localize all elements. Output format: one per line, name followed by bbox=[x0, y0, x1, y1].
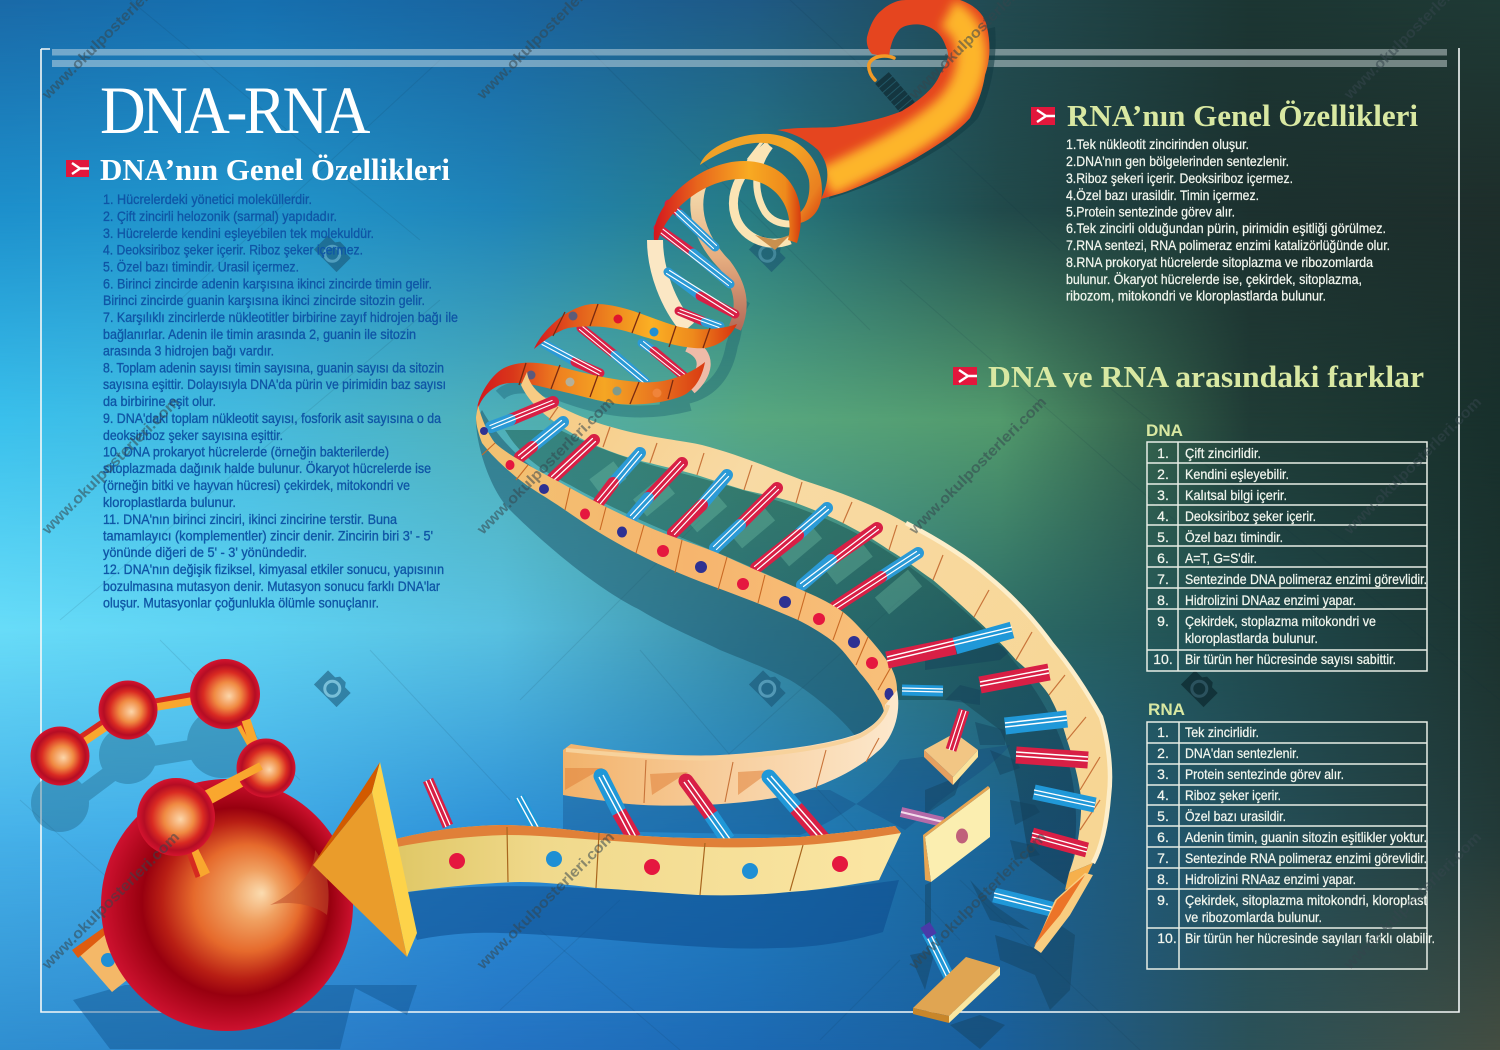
table: RNA bbox=[1147, 700, 1435, 969]
text block: RNA features: 8.RNA prokoryat hücrelerde sitoplazma ve ribozomlarda bbox=[1066, 254, 1373, 270]
broken base pairs on the right bbox=[887, 627, 1095, 996]
table: DNA: 5. bbox=[1157, 529, 1169, 545]
broken strand piece behind sphere bbox=[72, 928, 127, 992]
table: RNA: DNA'dan sentezlenir. bbox=[1185, 745, 1299, 761]
table: DNA: 2. bbox=[1157, 466, 1169, 482]
large red sphere bbox=[101, 779, 353, 1031]
text block: DNA features: 2. Çift zincirli helozonik (sarmal) yapıdadır. bbox=[103, 208, 337, 224]
text block: RNA features: bulunur. Ökaryot hücrelerde ise, çekirdek, sitoplazma, bbox=[1066, 270, 1362, 287]
table: DNA: Kalıtsal bilgi içerir. bbox=[1185, 487, 1287, 503]
shadows of the DNA ribbon bbox=[400, 300, 1076, 1049]
text block: DNA features bbox=[103, 191, 458, 610]
website watermarks: www.okulposterleri.com bbox=[38, 394, 183, 539]
text block: RNA features: 7.RNA sentezi, RNA polimeraz enzimi katalizörlüğünde olur. bbox=[1066, 237, 1390, 253]
website watermarks: www.okulposterleri.com bbox=[473, 829, 618, 974]
text block: RNA features: 4.Özel bazı urasildir. Timin içermez. bbox=[1066, 186, 1259, 203]
table: DNA: 9. bbox=[1157, 613, 1169, 629]
text block: DNA features: 3. Hücrelerde kendini eşleyebilen tek molekuldür. bbox=[103, 225, 374, 241]
text block: RNA features bbox=[1066, 136, 1390, 304]
table: DNA: Özel bazı timindir. bbox=[1185, 528, 1283, 545]
text block: RNA features: ribozom, mitokondri ve kloroplastlarda bulunur. bbox=[1066, 288, 1326, 304]
text block: DNA features: 4. Deoksiriboz şeker içerir. Riboz şeker içermez. bbox=[103, 242, 363, 258]
arrow head bbox=[313, 762, 417, 957]
table: DNA: Çift zincirlidir. bbox=[1185, 445, 1261, 461]
table: RNA: 6. bbox=[1157, 829, 1169, 845]
text block: DNA features: bağlanırlar. Adenin ile timin arasında 2, guanin ile sitozin bbox=[103, 326, 416, 342]
website watermarks: www.okulposterleri.com bbox=[905, 829, 1050, 974]
table: DNA: A=T, G=S'dir. bbox=[1185, 550, 1257, 566]
DNA tail and curl bbox=[777, 0, 996, 199]
table: DNA: kloroplastlarda bulunur. bbox=[1185, 630, 1318, 646]
website watermarks: www.okulposterleri.com bbox=[1340, 394, 1485, 539]
table: RNA: 4. bbox=[1157, 787, 1169, 803]
table: RNA: Bir türün her hücresinde sayıları farklı olabilir. bbox=[1185, 930, 1435, 946]
table: RNA: Adenin timin, guanin sitozin eşitlikler yoktur. bbox=[1185, 829, 1427, 845]
heading: DNA features: DNA’nın Genel Özellikleri bbox=[100, 152, 450, 187]
text block: DNA features: 10. DNA prokaryot hücrelerde (örneğin bakterilerde) bbox=[103, 444, 389, 460]
text block: DNA features: 12. DNA'nın değişik fiziksel, kimyasal etkiler sonucu, yapısının bbox=[103, 561, 444, 577]
text block: DNA features: 11. DNA'nın birinci zinciri, ikinci zincirine terstir. Buna bbox=[103, 511, 397, 527]
table: DNA: 7. bbox=[1157, 571, 1169, 587]
table: RNA: 8. bbox=[1157, 871, 1169, 887]
text block: DNA features: sitoplazmada dağınık halde bulunur. Ökaryot hücrelerde ise bbox=[103, 459, 431, 476]
heading: RNA features: RNA’nın Genel Özellikleri bbox=[1067, 98, 1418, 133]
table: RNA: ve ribozomlarda bulunur. bbox=[1185, 909, 1322, 925]
upper cream DNA strand bbox=[521, 372, 1110, 873]
table: DNA: 6. bbox=[1157, 550, 1169, 566]
text block: RNA features: 1.Tek nükleotit zincirinden oluşur. bbox=[1066, 136, 1249, 152]
table: DNA: DNA bbox=[1146, 421, 1183, 440]
table: RNA: 1. bbox=[1157, 724, 1169, 740]
table: RNA: RNA bbox=[1148, 700, 1185, 719]
table: DNA bbox=[1146, 421, 1427, 671]
table: DNA: Hidrolizini DNAaz enzimi yapar. bbox=[1185, 592, 1356, 608]
lower front rungs bbox=[426, 775, 826, 841]
table: DNA: 10. bbox=[1153, 651, 1173, 667]
text block: DNA features: arasında 3 hidrojen bağı vardır. bbox=[103, 342, 274, 358]
text block: DNA features: deoksiriboz şeker sayısına eşittir. bbox=[103, 427, 283, 443]
text block: DNA features: 1. Hücrelerdeki yönetici moleküllerdir. bbox=[103, 191, 312, 207]
text block: DNA features: 8. Toplam adenin sayısı timin sayısına, guanin sayısı da sitozin bbox=[103, 360, 444, 376]
text block: DNA features: (örneğin bitki ve hayvan hücresi) çekirdek, mitokondri ve bbox=[103, 477, 410, 493]
website watermarks: www.okulposterleri.com bbox=[1340, 829, 1485, 974]
table: RNA: Riboz şeker içerir. bbox=[1185, 787, 1281, 803]
text block: RNA features: 3.Riboz şekeri içerir. Deoksiriboz içermez. bbox=[1066, 170, 1293, 186]
table: DNA: 1. bbox=[1157, 445, 1169, 461]
text block: DNA features: 5. Özel bazı timindir. Urasil içermez. bbox=[103, 258, 299, 274]
table: RNA: 2. bbox=[1157, 745, 1169, 761]
table: DNA: 3. bbox=[1157, 487, 1169, 503]
broken strand blocks bbox=[913, 710, 1093, 1023]
table: RNA: 10. bbox=[1157, 930, 1177, 946]
lower cream strip bbox=[563, 690, 898, 806]
text block: DNA features: 7. Karşılıklı zincirlerde nükleotitler birbirine zayıf hidrojen bağı ile bbox=[103, 309, 458, 325]
middle base pairs bbox=[490, 400, 920, 608]
website watermarks: www.okulposterleri.com bbox=[905, 394, 1050, 539]
molecule shadow bbox=[31, 708, 417, 1049]
upper helix base pairs bbox=[542, 202, 736, 384]
text block: DNA features: yönünde diğeri de 5' - 3' yönündedir. bbox=[103, 544, 307, 560]
table: DNA: Kendini eşleyebilir. bbox=[1185, 466, 1289, 482]
text block: DNA features: 9. DNA'daki toplam nükleotit sayısı, fosforik asit sayısına o da bbox=[103, 410, 441, 426]
text block: DNA features: 6. Birinci zincirde adenin karşısına ikinci zincirde timin gelir. bbox=[103, 276, 432, 292]
table: RNA: Protein sentezinde görev alır. bbox=[1185, 766, 1344, 782]
table: RNA: Çekirdek, sitoplazma mitokondri, kloroplast bbox=[1185, 892, 1427, 908]
table: DNA: 4. bbox=[1157, 508, 1169, 524]
lower peach DNA strand with dots bbox=[476, 405, 897, 717]
table: DNA: Çekirdek, stoplazma mitokondri ve bbox=[1185, 613, 1376, 629]
table: RNA: 5. bbox=[1157, 808, 1169, 824]
text block: DNA features: oluşur. Mutasyonlar çoğunlukla ölümle sonuçlanır. bbox=[103, 594, 379, 610]
table: DNA: 8. bbox=[1157, 592, 1169, 608]
text block: DNA features: da birbirine eşit olur. bbox=[103, 393, 216, 409]
table: DNA: Sentezinde DNA polimeraz enzimi görevlidir. bbox=[1185, 571, 1427, 587]
heading: DNA and RNA differences: DNA ve RNA arasındaki farklar bbox=[988, 359, 1424, 394]
table: RNA: 3. bbox=[1157, 766, 1169, 782]
text block: DNA features: tamamlayıcı (komplementler) zincir denir. Zincirin biri 3' - 5' bbox=[103, 528, 433, 544]
front yellow strand bbox=[392, 825, 901, 895]
table: RNA: Tek zincirlidir. bbox=[1185, 724, 1259, 740]
text block: DNA features: sayısına eşittir. Dolayısıyla DNA'da pürin ve pirimidin baz sayısı bbox=[103, 376, 446, 392]
helix front ribbons with dots bbox=[477, 161, 801, 412]
table: RNA: Hidrolizini RNAaz enzimi yapar. bbox=[1185, 871, 1356, 887]
table: RNA: 9. bbox=[1157, 892, 1169, 908]
text block: DNA features: kloroplastlarda bulunur. bbox=[103, 494, 236, 510]
molecule chain of red spheres bbox=[30, 659, 296, 877]
camera watermarks bbox=[314, 232, 1221, 707]
text block: RNA features: 2.DNA'nın gen bölgelerinden sentezlenir. bbox=[1066, 153, 1289, 169]
title: DNA-RNA bbox=[100, 73, 370, 149]
table: DNA: Bir türün her hücresinde sayısı sabittir. bbox=[1185, 651, 1396, 667]
text block: RNA features: 5.Protein sentezinde görev alır. bbox=[1066, 204, 1235, 220]
website watermarks: www.okulposterleri.com bbox=[473, 394, 618, 539]
table: DNA: Deoksiriboz şeker içerir. bbox=[1185, 508, 1316, 524]
table: RNA: Sentezinde RNA polimeraz enzimi görevlidir. bbox=[1185, 850, 1427, 866]
text block: DNA features: Birinci zincirde guanin karşısına ikinci zincirde sitozin gelir. bbox=[103, 292, 425, 308]
table: RNA: Özel bazı urasildir. bbox=[1185, 807, 1286, 824]
table: RNA: 7. bbox=[1157, 850, 1169, 866]
website watermarks: www.okulposterleri.com bbox=[38, 829, 183, 974]
text block: DNA features: bozulmasına mutasyon denir. Mutasyon sonucu farklı DNA'lar bbox=[103, 578, 440, 594]
text block: RNA features: 6.Tek zincirli olduğundan pürin, pirimidin eşitliği görülmez. bbox=[1066, 220, 1386, 236]
upper helix back strands bbox=[655, 134, 822, 388]
